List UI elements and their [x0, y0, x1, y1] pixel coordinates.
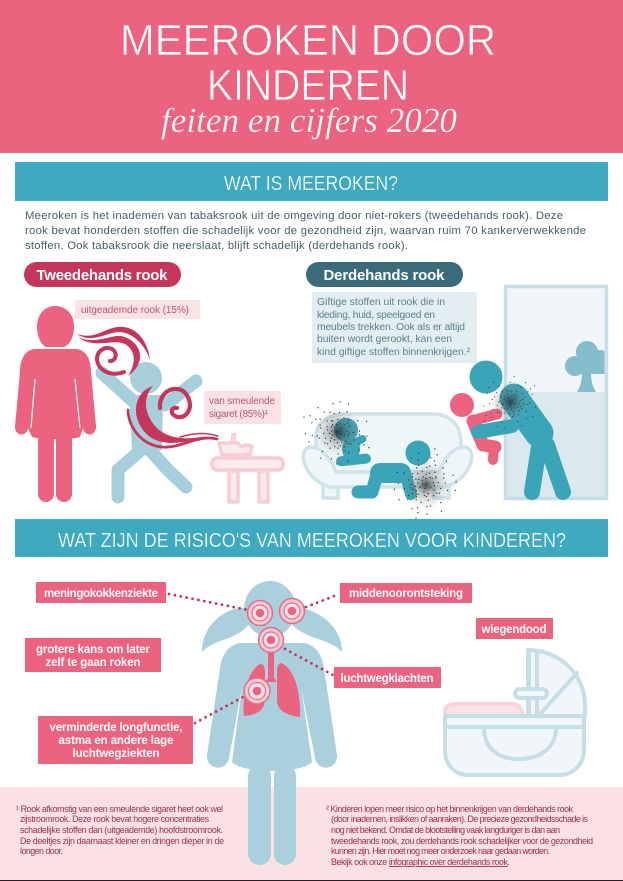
smoke swirl: exhaled: [77, 327, 150, 376]
smoke swirl: smouldering: [128, 386, 218, 447]
footnote 1: [16, 804, 224, 856]
intro text: [25, 210, 586, 252]
label: middenoorontsteking: middenoorontsteking: [349, 588, 463, 600]
footnote 2: ² Kinderen lopen meer risico op het binnenkrijgen van derdehands rook: [326, 804, 574, 814]
target: lung: [244, 678, 270, 704]
heading pill: derdehands: [306, 262, 463, 287]
intro text: stoffen. Ook tabaksrook die neerslaat, blijft schadelijk (derdehands rook).: [25, 240, 408, 252]
intro text: Meeroken is het inademen van tabaksrook uit de omgeving door niet-rokers (tweedehands rook). Deze: [25, 210, 563, 222]
label: wiegendood: wiegendood: [480, 624, 546, 636]
panel: tweedehands rook: [15, 262, 283, 502]
footnote 2: tweedehands rook, zou derdehands rook schadelijker voor de gezondheid: [331, 836, 593, 846]
icon: couch: [303, 414, 472, 498]
text box: giftige stoffen: [312, 292, 477, 363]
heading pill: tweedehands: Tweedehands rook: [36, 267, 168, 284]
label: van smeulende sigaret: sigaret (85%)¹: [209, 409, 269, 420]
footnote 1: De deeltjes zijn daarnaast kleiner en dringen dieper in de: [20, 836, 224, 846]
section heading: wat is meeroken: [15, 162, 608, 201]
girl silhouette: [202, 581, 342, 865]
label: meningokokkenziekte: meningokokkenziekte: [44, 588, 158, 600]
label: meningokokkenziekte: [36, 582, 166, 603]
label: verminderde longfunctie: verminderde longfunctie,: [50, 722, 182, 734]
text box: giftige stoffen: kind giftige stoffen binnenkrijgen.²: [317, 347, 471, 358]
footnote 1: schadelijke stoffen dan (uitgeademde) hoofdstroomrook.: [20, 825, 223, 835]
footnote 2: (door inademen, inslikken of aanraken). De precieze gezondheidsschade is: [331, 814, 589, 824]
text box: giftige stoffen: buiten wordt gerookt, kan een: [317, 334, 452, 345]
label: verminderde longfunctie: [38, 716, 193, 764]
icon: woman: [15, 306, 96, 502]
title: [120, 16, 496, 110]
target: right ear: [280, 598, 304, 624]
target: left ear: [248, 600, 272, 626]
label: luchtwegklachten: [334, 667, 441, 688]
text box: giftige stoffen: kleding, huid, speelgoed en: [317, 310, 435, 321]
label: luchtwegklachten: luchtwegklachten: [340, 673, 434, 685]
footnote 2: Bekijk ook onze infographic over derdehands rook.: [331, 857, 510, 867]
title: MEEROKEN DOOR: [120, 16, 496, 65]
icon: teddy bear: [334, 418, 371, 467]
footnote 1: longen door.: [20, 846, 63, 856]
label: grotere kans: [25, 638, 161, 672]
section heading: risico's: WAT ZIJN DE RISICO'S VAN MEEROKEN VOOR KINDEREN?: [58, 530, 566, 552]
footnote 2: nog niet bekend. Omdat de blootstelling vaak langduriger is dan aan: [331, 825, 560, 835]
footnote 1: ¹ Rook afkomstig van een smeulende sigaret heet ook wel: [16, 804, 223, 814]
icon: adult carrying baby: [450, 360, 563, 492]
illustration: door with tree: [506, 286, 612, 499]
label: wiegendood: [476, 618, 553, 639]
label: uitgeademde rook: [75, 300, 200, 319]
label: uitgeademde rook: uitgeademde rook (15%): [81, 305, 189, 316]
icon: child: [102, 362, 196, 497]
icon: tree: [565, 341, 604, 392]
footnote 2: [326, 804, 593, 867]
label: verminderde longfunctie: luchtwegziekten: [72, 748, 160, 760]
heading pill: tweedehands: [24, 262, 181, 287]
footnote 2: kunnen zijn. Hier moet nog meer onderzoek naar gedaan worden.: [331, 846, 550, 856]
label: verminderde longfunctie: astma en andere lage: [58, 735, 174, 747]
heading pill: derdehands: Derdehands rook: [324, 267, 445, 284]
title: KINDEREN: [207, 61, 409, 110]
label: middenoorontsteking: [340, 583, 472, 603]
label: grotere kans: zelf te gaan roken: [46, 657, 140, 669]
baby: [450, 393, 497, 460]
target: throat: [258, 628, 284, 652]
intro text: rook bevat honderden stoffen die schadelijk voor de gezondheid zijn, waarvan ruim 70 kankerverwekkende: [25, 225, 586, 237]
footnote band: [0, 787, 623, 880]
dotted connectors: [169, 594, 337, 723]
lungs: [244, 650, 300, 717]
icon: crawling child: [358, 440, 430, 494]
label: grotere kans: grotere kans om later: [36, 644, 151, 656]
bottom edge line: [0, 880, 623, 881]
text box: giftige stoffen: Giftige stoffen uit rook die in: [317, 297, 445, 308]
icon: table with ashtray: [212, 434, 283, 502]
subtitle: feiten en cijfers 2020: [161, 101, 457, 140]
panel: derdehands rook: [297, 262, 612, 527]
label: van smeulende sigaret: van smeulende: [209, 396, 275, 407]
header band: [0, 0, 623, 153]
third-hand particles: [297, 376, 536, 527]
section heading: wat is meeroken: WAT IS MEEROKEN?: [224, 173, 398, 195]
text box: giftige stoffen: meubels trekken. Ook als er altijd: [317, 322, 465, 333]
adult: [470, 360, 563, 492]
footnote 1: zijstroomrook. Deze rook bevat hogere concentraties: [20, 814, 210, 824]
illustration: girl with risk points: [202, 581, 342, 865]
label: van smeulende sigaret: [204, 391, 281, 424]
section heading: risico's: [15, 519, 608, 557]
icon: cradle: [445, 650, 585, 775]
